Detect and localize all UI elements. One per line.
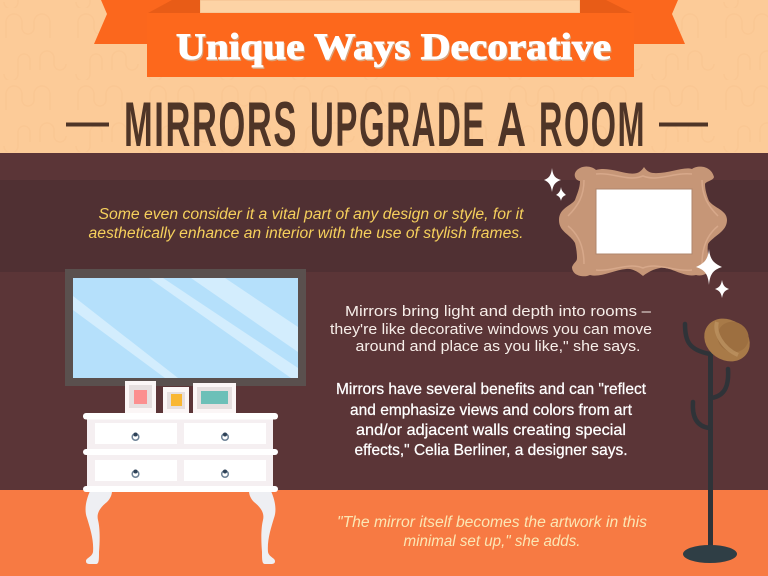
ornate picture frame (559, 167, 727, 276)
picture frames on dresser (125, 381, 236, 413)
floor (0, 490, 768, 576)
body text 2: and/or adjacent walls creating special (356, 422, 626, 439)
ribbon banner (94, 0, 685, 77)
body text 2: Mirrors have several benefits and can "reflect (336, 381, 647, 398)
coat rack (683, 324, 737, 563)
intro text: aesthetically enhance an interior with the use of stylish frames. (88, 225, 524, 242)
title line 2: ROOM (539, 90, 646, 160)
quote text: "The mirror itself becomes the artwork in this (337, 514, 647, 531)
body text 1: around and place as you like," she says. (356, 338, 640, 355)
body text 2: effects," Celia Berliner, a designer says. (354, 442, 628, 459)
quote text (337, 514, 647, 550)
title line 2: MIRRORS (124, 90, 298, 160)
intro text: Some even consider it a vital part of any design or style, for it (98, 206, 524, 223)
intro text (88, 206, 524, 242)
title line 1: Unique Ways Decorative (177, 28, 612, 70)
title line 1: Unique Ways Decorative (176, 27, 611, 68)
header background (0, 0, 768, 153)
body text 2 (336, 381, 647, 459)
body text 1: they're like decorative windows you can move (330, 321, 652, 338)
quote text: minimal set up," she adds. (404, 533, 580, 550)
title line 2: A (497, 90, 528, 160)
wall background (0, 153, 768, 490)
dresser (83, 413, 278, 564)
wall mirror (65, 269, 306, 386)
hat on coat rack (696, 310, 758, 370)
body text 1: Mirrors bring light and depth into rooms – (345, 303, 652, 320)
body text 1 (330, 303, 652, 355)
body text 2: and emphasize views and colors from art (350, 402, 633, 419)
sparkles (544, 168, 729, 298)
title line 2: UPGRADE (310, 90, 486, 160)
title line 2 (66, 90, 708, 160)
